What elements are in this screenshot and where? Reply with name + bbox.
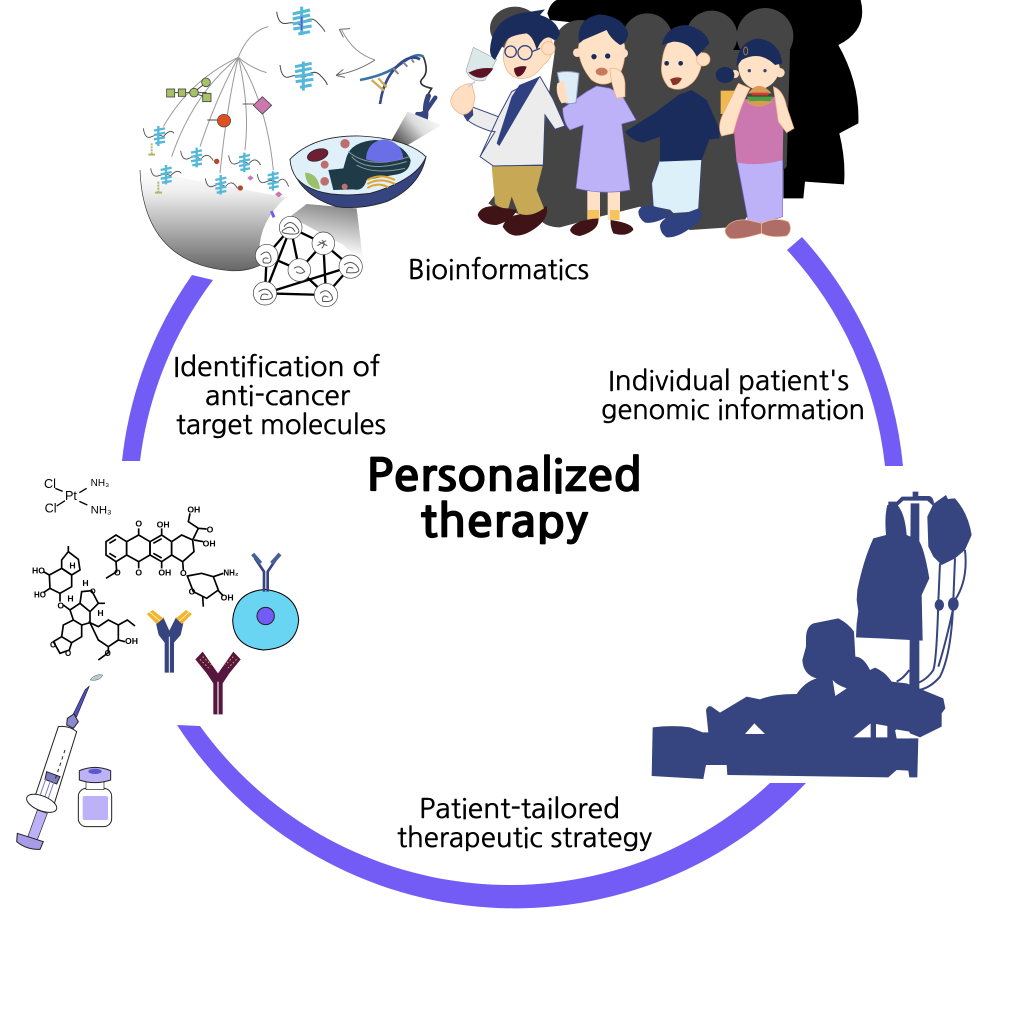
trousers	[737, 160, 783, 223]
shoes	[638, 206, 673, 223]
cone: network to cell	[290, 204, 363, 263]
vial	[78, 767, 112, 827]
molecule: etoposide	[32, 546, 138, 660]
flange	[24, 791, 59, 816]
coat	[464, 77, 565, 166]
molecule: cisplatin	[44, 477, 112, 516]
label: identification of anti-cancer target molecules: target molecules	[176, 411, 386, 438]
molecule: doxorubicin: O	[135, 568, 142, 578]
molecule: etoposide: HO	[34, 590, 46, 599]
gaps	[745, 680, 909, 738]
cell	[290, 136, 426, 208]
shirt sleeve	[463, 108, 473, 122]
illustration: bioinformatics	[140, 7, 442, 307]
molecule: cisplatin: Cl	[45, 502, 57, 516]
title: personalized therapy: Personalized	[366, 453, 642, 498]
label: patient-tailored therapeutic strategy: therapeutic strategy	[397, 824, 652, 851]
patient and bed	[652, 618, 945, 779]
molecule: cisplatin: Pt	[65, 489, 77, 503]
molecule: doxorubicin	[106, 505, 239, 607]
branching lines	[163, 27, 375, 173]
cycle arc: left	[122, 275, 213, 461]
molecule: doxorubicin: O	[180, 568, 187, 578]
IV pole	[888, 492, 948, 690]
molecule: etoposide: O	[50, 640, 56, 649]
molecule: cisplatin: NH₃	[91, 504, 112, 516]
shoes	[570, 218, 598, 236]
gray silhouettes	[488, 7, 793, 230]
glycan chain	[167, 78, 211, 102]
illustration: crowd of patients	[451, 0, 862, 239]
golgi	[367, 176, 395, 188]
molecule: cisplatin: Cl	[44, 477, 56, 491]
nucleus	[366, 139, 403, 162]
glass	[557, 71, 579, 104]
barrel	[34, 726, 77, 807]
dress	[563, 86, 636, 192]
chromosome	[417, 96, 435, 123]
hand	[610, 68, 625, 98]
molecule: etoposide: O	[105, 649, 111, 658]
person: girl with burger	[716, 38, 794, 239]
molecule: doxorubicin: O	[135, 519, 142, 529]
molecule: etoposide: H	[67, 594, 74, 604]
head	[503, 28, 552, 78]
molecule: etoposide: O	[65, 649, 71, 658]
needle	[73, 686, 89, 717]
molecule: doxorubicin: OH	[221, 593, 234, 603]
label: patient-tailored therapeutic strategy: Patient-tailored	[419, 795, 620, 822]
hair	[490, 9, 560, 60]
target cell	[233, 554, 299, 650]
molecule: doxorubicin: OH	[203, 539, 216, 549]
tie	[497, 77, 540, 146]
molecule: doxorubicin: NH₂	[223, 569, 239, 578]
DNA helix	[360, 55, 432, 104]
molecule: cisplatin: NH₃	[91, 478, 109, 489]
molecule: doxorubicin: O	[189, 587, 196, 597]
mitochondrion	[306, 146, 330, 164]
label: identification of anti-cancer target molecules: Identification of	[173, 353, 380, 380]
label: individual patient's genomic information: Individual patient's	[608, 367, 849, 394]
molecule: etoposide: O	[57, 601, 64, 611]
endoplasmic reticulum	[328, 140, 411, 190]
antibody: maroon	[195, 652, 241, 714]
molecule: etoposide: HO	[32, 565, 45, 575]
shoes	[478, 206, 517, 225]
molecule: etoposide: OH	[125, 636, 138, 646]
person: woman in lilac dress	[557, 14, 636, 236]
antibody: blue with yellow tips	[147, 610, 192, 673]
syringe	[17, 686, 89, 849]
head	[578, 28, 625, 84]
IV tubes	[897, 550, 966, 690]
person: kneeling boy	[625, 25, 720, 237]
label: identification of anti-cancer target molecules: anti-cancer	[205, 382, 350, 409]
cup	[721, 91, 736, 114]
bowl gradient	[140, 170, 286, 271]
trousers	[492, 166, 544, 215]
label: bioinformatics: Bioinformatics	[408, 256, 589, 283]
molecule: doxorubicin: OH	[187, 505, 200, 515]
label: identification of anti-cancer target molecules	[173, 353, 386, 438]
cycle arc: bottom	[177, 725, 806, 908]
IV bag: large	[856, 505, 929, 641]
label: individual patient's genomic information: genomic information	[601, 396, 865, 423]
molecule: doxorubicin: OH	[158, 567, 171, 577]
molecule: doxorubicin: O	[207, 525, 214, 535]
molecule: etoposide: H	[97, 608, 104, 618]
head	[661, 38, 703, 89]
orange sphere	[207, 114, 243, 191]
cell bowl	[290, 157, 426, 208]
pink diamond	[243, 97, 282, 197]
illustration: patient receiving infusion	[652, 492, 972, 779]
antibody on cell	[253, 554, 280, 592]
head	[738, 50, 780, 90]
person: doctor	[451, 9, 565, 236]
plunger	[27, 810, 47, 843]
sweater	[625, 90, 720, 162]
molecule: etoposide: O	[90, 586, 96, 595]
cone: chromosome to cell	[392, 112, 442, 147]
cell interior	[290, 136, 426, 195]
label: individual patient's genomic information	[601, 367, 865, 423]
protein network	[253, 216, 362, 307]
title: personalized therapy: therapy	[420, 499, 589, 544]
molecule: doxorubicin: OH	[157, 519, 170, 529]
hand and glass	[451, 83, 475, 114]
glasses	[505, 46, 540, 60]
droplet	[90, 675, 103, 680]
trousers	[652, 158, 702, 213]
purple tick	[270, 211, 275, 218]
hair	[662, 25, 709, 57]
molecule: etoposide: H	[82, 578, 89, 588]
burger	[748, 86, 772, 93]
protein glyphs	[143, 7, 327, 195]
title: personalized therapy	[366, 453, 642, 544]
cycle arc: right	[787, 237, 903, 466]
hair	[579, 14, 628, 45]
label: patient-tailored therapeutic strategy	[397, 795, 652, 851]
hair	[737, 38, 782, 67]
shirt	[733, 97, 783, 164]
molecule: doxorubicin: O	[114, 568, 121, 578]
IV bag: small	[927, 498, 972, 565]
legs	[587, 190, 600, 220]
black silhouettes	[547, 0, 862, 198]
illustration: drugs and antibodies	[17, 477, 299, 849]
molecule: etoposide: H	[69, 560, 76, 570]
arms	[720, 83, 750, 136]
cell nucleus	[257, 607, 274, 625]
shoes	[725, 220, 762, 239]
